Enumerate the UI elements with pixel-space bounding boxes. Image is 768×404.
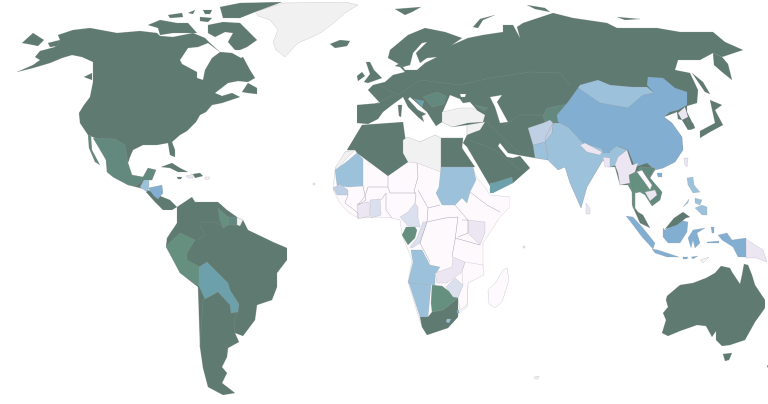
Mindanao bbox=[695, 205, 707, 215]
Bosnia bbox=[414, 99, 424, 107]
Greenland bbox=[255, 2, 358, 57]
Guyana bbox=[218, 208, 228, 228]
Kamchatka bbox=[713, 53, 732, 80]
Namibia bbox=[409, 283, 431, 317]
Western Sahara bbox=[335, 150, 355, 170]
Java bbox=[652, 249, 679, 257]
Timor and lesser islands bbox=[683, 256, 709, 263]
Palawan bbox=[683, 199, 689, 207]
Sudan bbox=[436, 167, 476, 205]
South Africa bbox=[420, 298, 458, 335]
Peru bbox=[166, 233, 200, 286]
Mongolia bbox=[578, 80, 654, 108]
Halmahera bbox=[711, 227, 714, 233]
Madagascar bbox=[488, 268, 509, 308]
Sumatra bbox=[626, 216, 655, 249]
India and Pakistan bbox=[533, 123, 627, 208]
region: North America bbox=[17, 2, 282, 190]
region: Africa bbox=[333, 122, 510, 335]
Black Sea bbox=[442, 95, 477, 114]
region: Southeast Asian islands bbox=[626, 177, 767, 263]
Ireland bbox=[357, 72, 365, 81]
Iceland bbox=[330, 40, 350, 48]
Hainan bbox=[657, 173, 662, 177]
Baja California bbox=[88, 135, 100, 165]
Sakhalin bbox=[692, 73, 710, 94]
Svalbard bbox=[395, 7, 421, 15]
Caspian Sea bbox=[490, 95, 508, 123]
Sea of Azov bbox=[460, 94, 466, 97]
Central America bbox=[140, 180, 177, 210]
Britain bbox=[364, 62, 382, 83]
region: Europe and Asia bbox=[357, 5, 743, 228]
Ivory Coast bbox=[357, 202, 370, 219]
Ellesmere Island bbox=[220, 2, 282, 18]
Zimbabwe bbox=[446, 278, 463, 298]
Caribbean islands bbox=[161, 163, 210, 180]
North Korea bbox=[678, 107, 688, 120]
Central Asia teal bbox=[543, 104, 568, 122]
Alaska islands bbox=[22, 33, 44, 46]
Afghanistan bbox=[528, 120, 553, 145]
Zambia bbox=[435, 257, 465, 283]
Congo bbox=[410, 222, 427, 248]
Sabah and Sarawak bbox=[665, 212, 690, 229]
Sri Lanka bbox=[586, 203, 590, 214]
Japan bbox=[700, 100, 723, 138]
Senegal bbox=[333, 184, 348, 195]
Bhutan bbox=[602, 148, 610, 153]
Honduras and Nicaragua bbox=[148, 185, 163, 199]
Gabon bbox=[402, 227, 417, 245]
Australia bbox=[662, 264, 765, 346]
Vietnam bbox=[640, 167, 662, 206]
Egypt bbox=[441, 138, 475, 167]
Paraguay bbox=[218, 290, 239, 313]
Thailand bbox=[629, 172, 650, 210]
Tasmania bbox=[723, 353, 732, 361]
Ghana bbox=[370, 199, 381, 218]
Morocco Algeria Tunisia bbox=[347, 122, 408, 176]
Cambodia bbox=[645, 190, 657, 201]
Visayas bbox=[695, 198, 702, 205]
Victoria Island bbox=[148, 20, 197, 35]
Mexico bbox=[93, 138, 156, 186]
Seram bbox=[707, 241, 719, 243]
region: South America bbox=[166, 197, 287, 395]
Myanmar bbox=[615, 150, 638, 185]
Yemen bbox=[490, 177, 513, 193]
Sulawesi bbox=[688, 228, 705, 248]
Cameroon bbox=[400, 203, 420, 227]
Lesotho bbox=[446, 319, 451, 323]
Borneo bbox=[663, 220, 688, 243]
small island specks bbox=[313, 183, 539, 379]
French Guiana bbox=[237, 217, 243, 226]
Baffin Island bbox=[208, 22, 257, 50]
Mauritania bbox=[335, 153, 363, 187]
New Zealand tip bbox=[767, 365, 768, 368]
Syria bbox=[467, 122, 485, 135]
Malawi and Mozambique bbox=[458, 262, 484, 310]
Italian islands bbox=[398, 105, 402, 117]
South Korea bbox=[687, 120, 695, 130]
Nepal bbox=[580, 143, 602, 155]
Taiwan bbox=[684, 158, 688, 167]
Suriname bbox=[228, 217, 237, 225]
Georgia bbox=[475, 105, 488, 111]
Papua New Guinea bbox=[746, 239, 767, 262]
Bangladesh bbox=[603, 157, 610, 167]
Indochina base bbox=[628, 167, 662, 208]
Bolivia bbox=[199, 262, 230, 299]
Queen Elizabeth Islands bbox=[168, 10, 212, 22]
Arctic islands bbox=[527, 5, 550, 12]
New Guinea west bbox=[718, 233, 746, 257]
Novaya Zemlya bbox=[473, 15, 495, 28]
South American borders bbox=[197, 222, 238, 347]
Libya bbox=[403, 135, 441, 172]
Luzon bbox=[687, 177, 700, 193]
Guatemala bbox=[140, 180, 149, 192]
Newfoundland bbox=[242, 83, 257, 94]
Laos bbox=[636, 170, 652, 190]
Swaziland bbox=[457, 310, 459, 313]
Balkans and Hungary bbox=[423, 92, 446, 107]
Hudson Bay bbox=[180, 43, 220, 80]
Malaysia bbox=[638, 212, 650, 228]
Kenya bbox=[468, 220, 485, 245]
African borders bbox=[345, 163, 500, 262]
region borders in Eurasia bbox=[375, 72, 570, 170]
China bbox=[557, 77, 687, 170]
Turkey bbox=[442, 108, 485, 127]
Angola bbox=[408, 250, 440, 285]
Botswana bbox=[431, 285, 458, 312]
